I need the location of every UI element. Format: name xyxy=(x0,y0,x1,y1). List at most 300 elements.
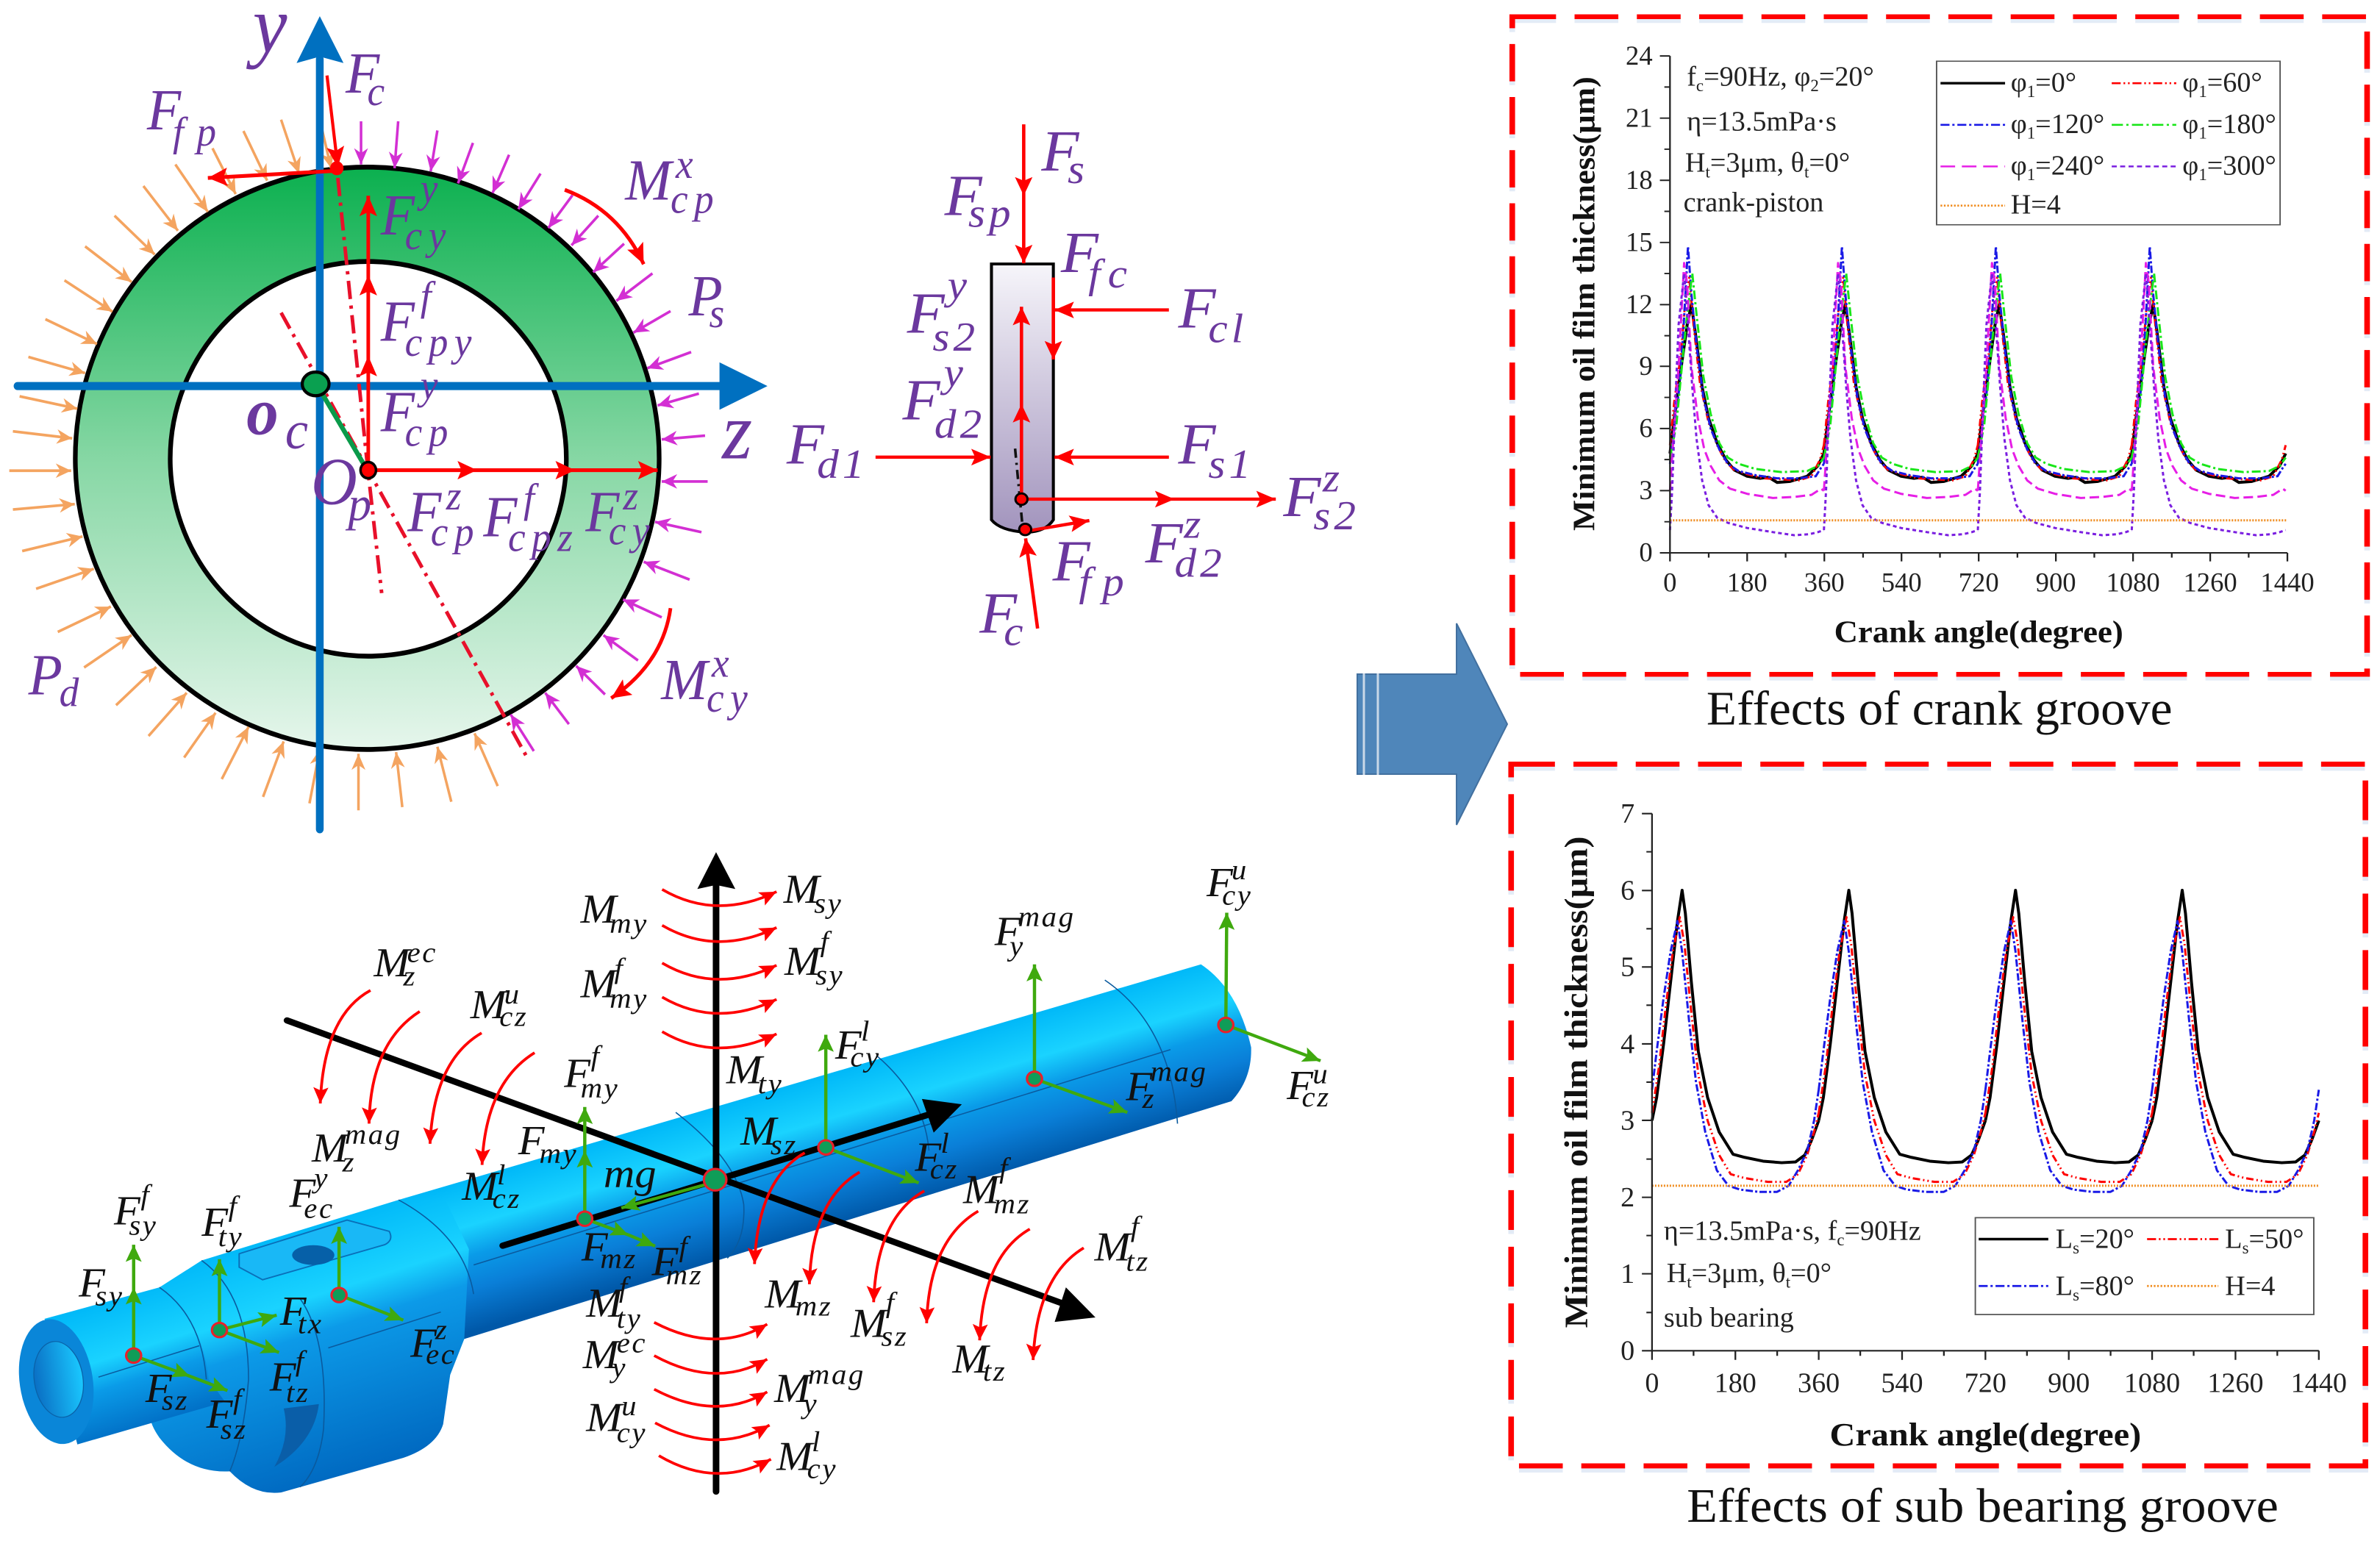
piston force labels: z xyxy=(1183,502,1204,547)
ring force labels: F xyxy=(381,379,415,444)
chart 1 legend: =0° xyxy=(2035,67,2076,98)
chart 1 annotation: f xyxy=(1687,62,1696,93)
piston centre line xyxy=(1015,448,1023,527)
crankshaft right labels xyxy=(726,854,1331,1484)
ring force labels: O xyxy=(311,446,357,519)
big blue arrow xyxy=(1357,623,1507,825)
chart 1 tick labels: 1440 xyxy=(2260,568,2315,598)
chart 2 tick labels: 1440 xyxy=(2291,1367,2347,1398)
chart 1 legend: 1 xyxy=(2027,165,2035,184)
chart 2 curves xyxy=(1652,890,2319,1192)
crankshaft right labels: cy xyxy=(1222,879,1252,911)
crankshaft left labels: y xyxy=(609,1351,627,1384)
piston force labels: c xyxy=(1004,609,1027,654)
ring force labels: cpy xyxy=(405,319,478,365)
crankshaft right labels: F xyxy=(1126,1065,1152,1109)
chart 2 tick labels: 5 xyxy=(1620,952,1634,983)
chart 1 legend: 1 xyxy=(2027,82,2035,101)
crankshaft right labels: y xyxy=(1007,929,1025,962)
crankshaft left labels: y xyxy=(311,1162,329,1194)
heading: effects of crank groove: Effects of crank groove xyxy=(1707,682,2173,735)
crankshaft left labels: sy xyxy=(95,1279,124,1312)
crankshaft left labels: mg xyxy=(604,1151,657,1197)
ring force labels: cpz xyxy=(508,514,579,560)
crankshaft left labels: f xyxy=(296,1345,307,1377)
piston force labels: F xyxy=(945,163,982,228)
crankshaft right labels: M xyxy=(952,1337,988,1382)
dashed frame xyxy=(1511,764,2365,1470)
ring force labels: M xyxy=(661,648,707,712)
crankshaft left labels: f xyxy=(591,1040,603,1072)
chart 1 legend: 1 xyxy=(2027,124,2035,143)
chart 2 tick labels: 0 xyxy=(1645,1367,1659,1398)
ring force labels: z xyxy=(446,473,468,518)
chart 2 annotation: =90Hz xyxy=(1845,1216,1921,1247)
crankshaft left labels: F xyxy=(652,1239,678,1284)
chart 1 tick labels: 9 xyxy=(1639,351,1653,381)
crankshaft left labels: mag xyxy=(345,1118,402,1151)
black axis arrowheads xyxy=(697,852,1096,1322)
crankshaft left labels: M xyxy=(312,1126,348,1171)
crankshaft left labels: ty xyxy=(218,1220,243,1253)
chart 1 tick labels: 0 xyxy=(1639,537,1653,568)
piston force labels: fp xyxy=(1079,559,1135,605)
crankshaft left labels: mz xyxy=(666,1259,703,1291)
crankshaft left labels: F xyxy=(79,1260,105,1306)
crankshaft left labels: cz xyxy=(493,1182,521,1214)
ring force labels: cy xyxy=(609,508,656,554)
crankshaft right labels: l xyxy=(940,1127,951,1159)
chart 1 axis titles: Crank angle(degree) xyxy=(1834,615,2123,650)
chart 2 legend: L xyxy=(2056,1224,2073,1255)
ring force labels: x xyxy=(675,141,699,187)
crankshaft right labels: cz xyxy=(1302,1081,1331,1113)
chart 2 annotation: sub bearing xyxy=(1664,1303,1794,1334)
crankshaft left labels: tz xyxy=(286,1376,310,1409)
piston force labels: cl xyxy=(1208,307,1247,351)
chart 1 tick labels: 3 xyxy=(1639,475,1653,505)
crankshaft right labels: f xyxy=(821,925,832,957)
crankshaft left labels: my xyxy=(610,907,648,940)
chart 2 annotation: t xyxy=(1687,1273,1692,1292)
piston force labels: s xyxy=(1068,147,1088,193)
ring force labels: cp xyxy=(405,409,454,455)
ring force labels: d xyxy=(60,670,85,715)
chart 2 legend xyxy=(1976,1217,2314,1314)
chart 2 tick labels: 0 xyxy=(1620,1336,1634,1367)
ring force labels: z xyxy=(721,387,752,476)
panel: effects of crank groove xyxy=(1512,17,2367,735)
piston force labels: s2 xyxy=(932,315,979,360)
piston force labels: y xyxy=(944,263,971,308)
piston force labels: s2 xyxy=(1313,493,1359,539)
ring force labels: F xyxy=(346,41,379,106)
crankshaft right labels: M xyxy=(851,1301,887,1346)
chart 2 axis titles: Crank angle(degree) xyxy=(1829,1417,2141,1453)
chart 1 annotation: H xyxy=(1685,148,1705,179)
crankshaft right labels: M xyxy=(963,1167,999,1212)
ring force labels: M xyxy=(625,148,671,212)
crankshaft left labels: u xyxy=(504,978,521,1010)
chart 2 legend: L xyxy=(2056,1270,2073,1301)
crankshaft right labels: f xyxy=(886,1287,898,1319)
crankshaft left labels: u xyxy=(621,1389,638,1422)
ring force labels: P xyxy=(689,264,723,328)
crankshaft right labels: M xyxy=(726,1048,762,1092)
red moment arcs on y axis xyxy=(654,890,776,1473)
crankshaft right labels: u xyxy=(1312,1057,1329,1090)
crankshaft right labels: cy xyxy=(850,1040,881,1073)
crankshaft right labels: sy xyxy=(814,887,843,919)
magenta pressure arrows Ps xyxy=(361,121,707,751)
crankshaft right labels: M xyxy=(784,867,820,912)
crankshaft left labels: M xyxy=(581,887,616,932)
red dash-dot centre lines xyxy=(281,178,527,757)
crankshaft left labels: sy xyxy=(129,1209,157,1242)
chart 2 annotation: =3μm, θ xyxy=(1692,1258,1786,1289)
crankshaft right labels: mag xyxy=(1151,1055,1207,1087)
crankshaft left labels: F xyxy=(410,1321,437,1366)
crankshaft left labels: ty xyxy=(617,1302,642,1334)
ring force labels xyxy=(28,0,754,720)
chart 1 tick labels: 12 xyxy=(1626,289,1653,319)
chart 2 axes xyxy=(1642,814,2319,1360)
chart 1 legend: φ xyxy=(2011,67,2027,98)
piston force labels: fc xyxy=(1088,251,1134,297)
crankshaft right labels: M xyxy=(774,1366,810,1411)
chart 1 annotation: =20° xyxy=(1819,62,1874,93)
chart 2 tick labels: 4 xyxy=(1620,1029,1634,1059)
chart 1 annotation: c xyxy=(1696,76,1704,95)
crankshaft left labels: ec xyxy=(617,1326,647,1359)
crankshaft right labels: f xyxy=(1131,1210,1143,1242)
chart 2 legend: H=4 xyxy=(2225,1271,2275,1302)
ring force labels: F xyxy=(381,289,415,354)
piston force labels: F xyxy=(1053,528,1090,593)
crankshaft left labels: F xyxy=(270,1355,296,1400)
ring force labels: c xyxy=(285,401,308,461)
chart 2 annotation: H xyxy=(1667,1258,1687,1289)
crankshaft left labels: ec xyxy=(304,1192,335,1224)
crankshaft right labels: M xyxy=(765,1272,801,1317)
crankshaft right labels: z xyxy=(1142,1082,1156,1115)
chart 1 tick labels: 1260 xyxy=(2183,568,2237,598)
chart 1 legend: φ xyxy=(2182,67,2198,98)
chart 1 tick labels: 540 xyxy=(1882,568,1922,598)
piston force labels: F xyxy=(1041,118,1079,184)
piston force labels: d1 xyxy=(817,442,868,487)
eccentric link and centre points xyxy=(302,161,376,479)
ring force labels: F xyxy=(483,484,518,549)
piston force labels: F xyxy=(1061,220,1098,285)
ring force labels: c xyxy=(367,68,391,114)
chart 2 legend: =20° xyxy=(2079,1224,2134,1255)
crankshaft right labels: F xyxy=(835,1023,862,1068)
crankshaft right labels: tz xyxy=(983,1355,1007,1387)
crankshaft right labels: mag xyxy=(808,1358,865,1390)
dashed frame xyxy=(1512,17,2367,678)
crankshaft left labels: sz xyxy=(221,1413,248,1445)
chart 2 tick labels: 1 xyxy=(1620,1259,1634,1289)
crankshaft right labels: F xyxy=(1207,860,1233,906)
piston force labels: F xyxy=(1283,464,1321,529)
chart 2 tick labels: 3 xyxy=(1620,1105,1634,1136)
piston force labels: z xyxy=(1322,456,1343,501)
chart 1 annotation xyxy=(1684,62,1874,218)
chart 1 annotation: =90Hz, φ xyxy=(1704,62,1810,93)
ring force labels: fp xyxy=(173,109,229,154)
chart 1 tick labels: 900 xyxy=(2036,568,2076,598)
chart 1 tick labels: 24 xyxy=(1626,40,1653,71)
chart 2 tick labels: 180 xyxy=(1715,1367,1757,1398)
ring force labels: y xyxy=(417,165,444,211)
green force vectors xyxy=(134,913,1321,1391)
crankshaft left labels: my xyxy=(581,1072,619,1104)
chart 2 tick labels xyxy=(1620,798,2347,1398)
chart 1 legend: 1 xyxy=(2198,82,2207,101)
crankshaft left labels: M xyxy=(586,1395,622,1440)
chart 2 legend: s xyxy=(2073,1239,2079,1257)
chart 2 tick labels: 540 xyxy=(1881,1367,1923,1398)
ring force labels: F xyxy=(407,479,441,544)
chart 1 legend: =240° xyxy=(2035,151,2104,182)
piston points xyxy=(1015,493,1032,535)
ring force labels: F xyxy=(381,183,415,247)
chart 1 legend: =120° xyxy=(2035,109,2104,140)
chart 1 legend: =180° xyxy=(2207,109,2276,140)
ring force labels: cp xyxy=(431,509,480,554)
crankshaft left labels: F xyxy=(582,1225,608,1270)
ring force labels: cy xyxy=(707,675,754,720)
crankshaft right labels: F xyxy=(1287,1063,1313,1109)
chart 1 axis titles: Minimum oil film thickness(μm) xyxy=(1567,76,1601,531)
chart 1 legend: 1 xyxy=(2198,124,2207,143)
crankshaft left labels: cy xyxy=(617,1417,647,1448)
crankshaft left labels: f xyxy=(229,1190,240,1222)
crankshaft right labels: cz xyxy=(930,1153,959,1185)
ring force labels: F xyxy=(147,77,181,142)
chart 1 tick labels xyxy=(1626,40,2315,598)
crankshaft left labels: M xyxy=(586,1281,622,1326)
crankshaft right labels: M xyxy=(1095,1225,1130,1270)
crankshaft left labels: F xyxy=(146,1366,172,1411)
blue y and z axes xyxy=(18,16,768,829)
force application points xyxy=(126,1017,1233,1363)
ring force labels: cy xyxy=(405,212,452,258)
piston body xyxy=(991,264,1054,532)
crankshaft right labels: M xyxy=(785,939,821,984)
crankshaft right labels: l xyxy=(861,1015,871,1047)
ring force labels: x xyxy=(711,640,735,686)
heading: effects of sub bearing groove: Effects of sub bearing groove xyxy=(1687,1479,2279,1533)
chart 1 axes xyxy=(1660,56,2287,562)
chart 2 legend: =80° xyxy=(2079,1270,2134,1301)
crankshaft right labels: cy xyxy=(807,1452,837,1484)
chart 2 tick labels: 720 xyxy=(1965,1367,2006,1398)
ring force labels: y xyxy=(417,362,444,408)
chart 1 legend xyxy=(1937,61,2280,225)
crankshaft left labels: ec xyxy=(426,1338,456,1370)
crankshaft right labels: sz xyxy=(881,1320,908,1352)
chart 2 annotation: c xyxy=(1837,1231,1845,1249)
chart 2 legend: L xyxy=(2225,1224,2243,1255)
chart 2 tick labels: 900 xyxy=(2048,1367,2090,1398)
crankshaft left labels: my xyxy=(539,1137,578,1170)
piston force labels xyxy=(786,118,1359,654)
chart 2 tick labels: 7 xyxy=(1620,798,1634,829)
crankshaft left labels: l xyxy=(497,1159,507,1191)
piston force labels: F xyxy=(1179,411,1216,476)
crankshaft right labels: sy xyxy=(815,959,844,991)
ring force labels: f xyxy=(421,273,437,319)
chart 1 tick labels: 21 xyxy=(1626,102,1653,132)
crankshaft left labels: F xyxy=(280,1289,307,1334)
crankshaft left labels: z xyxy=(435,1313,449,1345)
crankshaft left labels xyxy=(78,887,703,1448)
ring force labels: P xyxy=(29,643,62,707)
chart 1 tick labels: 360 xyxy=(1804,568,1845,598)
chart 2 legend: s xyxy=(2073,1286,2079,1304)
crankshaft right labels: F xyxy=(915,1135,941,1180)
chart 2 tick labels: 360 xyxy=(1798,1367,1840,1398)
crankshaft left labels: F xyxy=(201,1200,228,1245)
crankshaft left labels: M xyxy=(462,1164,498,1209)
crankshaft left labels: F xyxy=(114,1189,140,1234)
chart 1 legend: φ xyxy=(2011,109,2027,140)
ring force diagram xyxy=(10,0,768,829)
chart 2 axis titles: Minimum oil film thickness(μm) xyxy=(1559,836,1595,1328)
ring force labels: z xyxy=(622,473,645,518)
crankshaft left labels: f xyxy=(140,1178,153,1211)
crankshaft left labels: F xyxy=(207,1392,232,1437)
piston force labels: d2 xyxy=(1174,541,1226,586)
chart 2 annotation: η=13.5mPa·s, f xyxy=(1664,1216,1837,1247)
crankshaft left labels: M xyxy=(581,961,616,1006)
chart 1 annotation: =0° xyxy=(1809,148,1850,179)
black axes xyxy=(287,881,1074,1492)
orange pressure arrows Pd xyxy=(10,113,498,810)
ring xyxy=(75,167,660,749)
crankshaft left labels: cz xyxy=(499,1000,528,1032)
chart 2 tick labels: 6 xyxy=(1620,876,1634,906)
chart 1 legend: φ xyxy=(2182,109,2198,140)
crankshaft right labels: M xyxy=(776,1434,812,1479)
chart 1 tick labels: 6 xyxy=(1639,413,1653,443)
piston force labels: sp xyxy=(968,191,1015,236)
ring force labels: F xyxy=(585,479,619,544)
piston force labels: d2 xyxy=(935,402,985,447)
piston force labels: y xyxy=(940,351,967,396)
chart 1 tick labels: 720 xyxy=(1959,568,1999,598)
crankshaft solid xyxy=(11,965,1251,1493)
chart 1 tick labels: 1080 xyxy=(2106,568,2160,598)
chart 1 annotation: =3μm, θ xyxy=(1710,148,1804,179)
chart 2 annotation xyxy=(1664,1216,1921,1334)
crankshaft force diagram xyxy=(11,852,1331,1493)
crankshaft left labels: f xyxy=(233,1383,245,1415)
chart 1 legend: 1 xyxy=(2198,165,2207,184)
crankshaft left labels: F xyxy=(518,1118,545,1164)
crankshaft right labels: u xyxy=(1232,854,1248,886)
crankshaft right labels: M xyxy=(740,1109,776,1154)
piston force labels: s1 xyxy=(1208,442,1254,487)
ring force labels: f xyxy=(523,476,540,521)
crankshaft left labels: f xyxy=(615,952,626,984)
chart 1 curves xyxy=(1670,246,2286,535)
chart 1 axis titles xyxy=(1567,76,2123,650)
piston force labels: F xyxy=(979,581,1017,645)
panel: effects of sub bearing groove xyxy=(1511,764,2365,1533)
crankshaft left labels: F xyxy=(290,1170,315,1216)
ring force labels: p xyxy=(346,476,371,531)
crankshaft left labels: F xyxy=(564,1051,590,1096)
crankshaft left labels: f xyxy=(619,1270,631,1303)
crankshaft right labels: F xyxy=(995,909,1021,954)
ring force labels: s xyxy=(710,290,731,336)
piston force labels: F xyxy=(907,281,945,346)
chart 2 tick labels: 1260 xyxy=(2207,1367,2264,1398)
crankshaft right labels: l xyxy=(812,1425,822,1458)
crankshaft left labels: tx xyxy=(298,1307,324,1339)
crankshaft left labels: ec xyxy=(407,936,437,968)
ring force labels: cp xyxy=(671,176,720,222)
piston force labels: F xyxy=(1146,510,1183,576)
crankshaft right labels: mag xyxy=(1018,901,1076,933)
crankshaft left labels: M xyxy=(471,982,507,1028)
red moment arcs on z axis xyxy=(321,990,1084,1360)
crankshaft right labels: ty xyxy=(758,1067,783,1100)
crankshaft left labels: M xyxy=(583,1332,619,1378)
chart 1 annotation: crank-piston xyxy=(1684,187,1823,218)
chart 1 legend: H=4 xyxy=(2011,190,2061,221)
crankshaft left labels: M xyxy=(374,940,410,986)
chart 1 tick labels: 180 xyxy=(1727,568,1768,598)
piston force labels: F xyxy=(903,367,940,432)
chart 2 legend: =50° xyxy=(2249,1224,2304,1255)
chart 2 tick labels: 2 xyxy=(1620,1182,1634,1213)
chart 2 legend: s xyxy=(2243,1239,2249,1257)
crankshaft left labels: z xyxy=(342,1145,356,1178)
ring force labels: o xyxy=(246,376,279,449)
chart 1 annotation: 2 xyxy=(1810,76,1819,95)
crankshaft left labels: mz xyxy=(600,1242,637,1275)
chart 1 legend: =60° xyxy=(2207,67,2262,98)
red force arrows xyxy=(208,76,671,698)
crankshaft right labels: y xyxy=(800,1387,818,1420)
crankshaft right labels: mz xyxy=(993,1187,1031,1220)
chart 1 annotation: t xyxy=(1804,162,1809,181)
chart 1 tick labels: 0 xyxy=(1663,568,1676,598)
chart 2 annotation: t xyxy=(1786,1273,1791,1292)
crankshaft left labels: my xyxy=(610,982,648,1015)
chart 1 legend: φ xyxy=(2011,151,2027,182)
piston force arrows xyxy=(876,124,1276,629)
chart 1 annotation: t xyxy=(1705,162,1710,181)
crankshaft left labels: z xyxy=(402,959,417,992)
crankshaft right labels: mz xyxy=(796,1289,832,1322)
crankshaft right labels: f xyxy=(999,1151,1012,1184)
chart 1 annotation: η=13.5mPa·s xyxy=(1687,106,1837,137)
chart 1 legend: =300° xyxy=(2207,151,2276,182)
chart 2 annotation: =0° xyxy=(1790,1258,1832,1289)
chart 2 axis titles xyxy=(1559,836,2141,1453)
crankshaft right labels: sz xyxy=(771,1128,798,1161)
chart 1 legend: φ xyxy=(2182,151,2198,182)
piston force diagram xyxy=(786,118,1359,654)
crankshaft left labels: sz xyxy=(162,1384,189,1417)
chart 1 tick labels: 18 xyxy=(1626,165,1653,195)
crankshaft left labels: f xyxy=(679,1230,691,1262)
